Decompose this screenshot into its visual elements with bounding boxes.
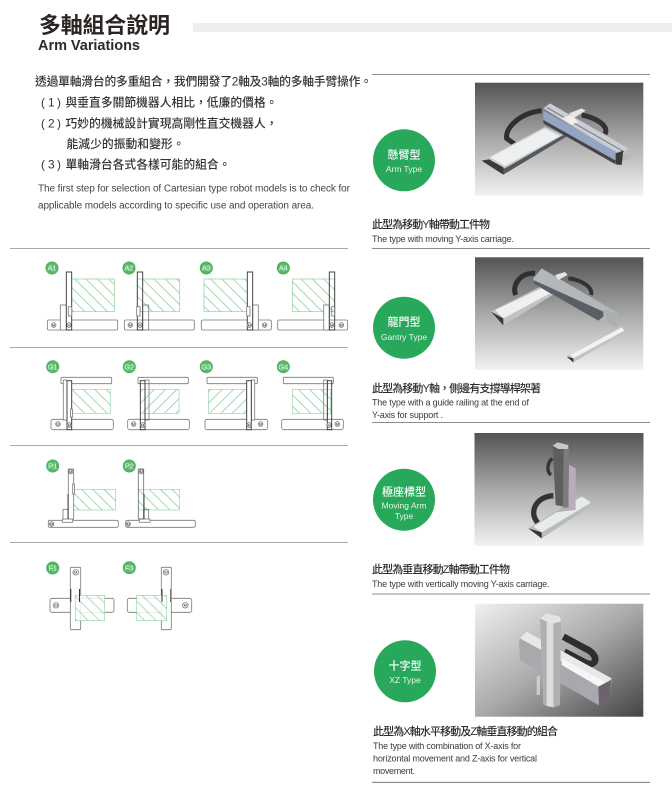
diagram A3: A3: [202, 264, 211, 273]
panel: XZ type: [373, 604, 643, 776]
diagram G1: M: [68, 422, 71, 427]
intro text block: Chinese: ): [57, 116, 61, 130]
panel: arm type: [372, 83, 643, 244]
photo: moving arm robot: [474, 433, 644, 546]
diagram G3: [200, 360, 268, 430]
intro text block: Chinese: ): [57, 158, 61, 172]
caption: gantry type: The type with a guide railing at the end of: [372, 398, 529, 408]
intro text block: Chinese: 能減少的振動和變形。: [66, 137, 184, 151]
caption: XZ type: 此型為X軸水平移動及Z軸垂直移動的組合: [373, 724, 558, 738]
diagram F1: F1: [48, 564, 57, 573]
panel: moving arm type: [372, 433, 644, 589]
intro text block: Chinese: 單軸滑台各式各樣可能的組合。: [66, 158, 230, 172]
diagram P1: P1: [48, 462, 57, 471]
diagram A3: M: [248, 322, 251, 327]
badge: moving arm type: Type: [395, 511, 413, 521]
diagram G4: G4: [278, 362, 288, 371]
diagram A2: M: [138, 322, 142, 327]
title: Chinese heading: 多軸組合說明: [39, 13, 170, 38]
diagram P2: P2: [125, 462, 134, 471]
diagram A1: M: [67, 322, 71, 327]
diagram A1: A1: [47, 264, 57, 273]
diagram P1: M: [69, 469, 72, 474]
badge: moving arm type: 極座標型: [382, 484, 426, 498]
caption: moving arm type: 此型為垂直移動Z軸帶動工件物: [372, 562, 510, 576]
diagram P2: [123, 460, 195, 527]
caption: arm type: [372, 217, 514, 244]
intro text block: Chinese: (: [41, 158, 45, 172]
intro text block: Chinese: 1: [48, 96, 55, 110]
diagram G2: G2: [124, 362, 134, 371]
diagram G4: M: [336, 421, 339, 426]
intro text block: Chinese: 3: [48, 158, 55, 172]
diagram F3: [123, 561, 192, 630]
diagram G3: M: [259, 421, 262, 426]
intro text block: English: The first step for selection of Cartesian type robot models is to check for: [38, 184, 351, 194]
diagram F1: M: [54, 603, 58, 608]
header grey bar: [193, 23, 672, 32]
photo: gantry type robot: [475, 257, 643, 370]
diagram G1: [46, 360, 113, 430]
panel: gantry type: [372, 257, 643, 420]
diagram G2: M: [141, 422, 144, 427]
intro text block: English: [38, 184, 351, 212]
diagram G4: [277, 360, 343, 430]
badge: arm type: Arm Type: [386, 164, 422, 174]
diagram A2: M: [129, 322, 132, 327]
intro text block: Chinese: 巧妙的機械設計實現高剛性直交機器人，: [66, 116, 278, 130]
caption: moving arm type: [372, 562, 550, 589]
diagram A4: M: [330, 322, 333, 327]
diagram G3: G3: [201, 362, 211, 371]
diagram G2: [123, 360, 189, 430]
diagram G2: M: [132, 421, 135, 426]
diagram F3: F3: [125, 563, 134, 572]
diagram A1: [46, 262, 118, 330]
diagram F3: M: [164, 570, 168, 575]
photo: XZ type robot: [475, 604, 643, 717]
intro text block: English: applicable models according to specific use and operation area.: [38, 200, 314, 212]
diagram A2: [122, 262, 194, 330]
badge: XZ type: XZ Type: [389, 675, 421, 685]
intro text block: Chinese: 透過單軸滑台的多重組合，我們開發了2軸及3軸的多軸手臂操作。: [35, 74, 372, 88]
caption: arm type: 此型為移動Y軸帶動工件物: [372, 217, 490, 231]
intro text block: Chinese: 2: [48, 116, 55, 130]
intro text block: Chinese: (: [41, 96, 45, 110]
badge: moving arm type: Moving Arm: [382, 500, 426, 510]
badge: XZ type: 十字型: [388, 658, 422, 672]
diagram P2: M: [127, 521, 130, 526]
diagram P2: M: [140, 469, 143, 474]
intro text block: Chinese: 與垂直多關節機器人相比，低廉的價格。: [66, 96, 278, 110]
caption: gantry type: [372, 381, 541, 420]
intro text block: Chinese: [35, 74, 372, 172]
title: English heading: Arm Variations: [38, 38, 140, 54]
intro text block: Chinese: ): [57, 96, 61, 110]
badge: arm type: [373, 129, 435, 191]
diagram A2: A2: [124, 264, 134, 273]
caption: moving arm type: The type with vertically moving Y-axis carriage.: [372, 579, 550, 589]
diagram G3: M: [248, 422, 251, 427]
caption: XZ type: [373, 724, 558, 776]
diagram P1: [46, 460, 118, 527]
badge: gantry type: Gantry Type: [381, 332, 427, 342]
photo: arm type robot: [475, 83, 643, 196]
diagram A3: M: [263, 322, 266, 327]
diagram A4: A4: [279, 264, 288, 273]
diagram A4: M: [340, 322, 343, 327]
badge: gantry type: 龍門型: [388, 314, 420, 328]
badge: gantry type: [373, 297, 435, 359]
diagram G4: M: [327, 422, 331, 427]
diagram A3: [200, 262, 271, 330]
caption: XZ type: movement.: [373, 766, 415, 776]
caption: XZ type: horizontal movement and Z-axis for vertical: [373, 754, 537, 764]
diagram G1: G1: [48, 362, 58, 371]
diagram P1: M: [50, 521, 53, 526]
diagram F1: M: [74, 570, 77, 575]
diagram G1: M: [56, 421, 60, 426]
diagram F1: [46, 562, 114, 630]
diagram A1: M: [52, 322, 55, 327]
badge: moving arm type: [373, 469, 435, 531]
badge: XZ type: [374, 640, 436, 702]
caption: arm type: The type with moving Y-axis carriage.: [372, 234, 514, 244]
caption: gantry type: 此型為移動Y軸，側邊有支撐導桿架著: [372, 381, 541, 395]
diagram A4: [277, 262, 348, 330]
badge: arm type: 懸臂型: [388, 148, 420, 162]
intro text block: Chinese: (: [41, 116, 45, 130]
caption: XZ type: The type with combination of X-axis for: [373, 741, 521, 751]
diagram F3: M: [184, 603, 187, 608]
caption: gantry type: Y-axis for support .: [372, 410, 443, 420]
